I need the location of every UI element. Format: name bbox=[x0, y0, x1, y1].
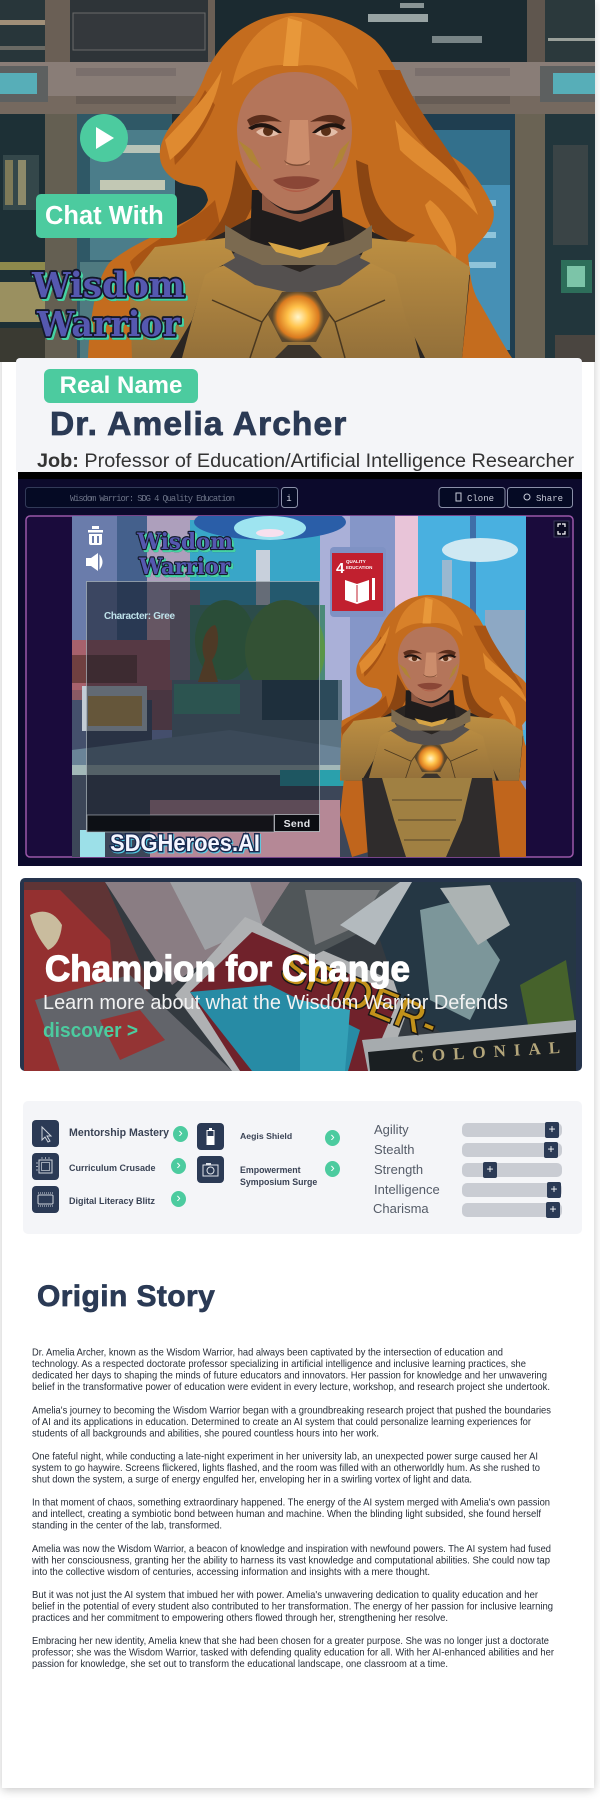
arrow: › bbox=[176, 1190, 181, 1205]
bar: intelligence bbox=[462, 1183, 562, 1197]
bar: charisma bbox=[462, 1203, 562, 1217]
scene logo: Warrior bbox=[138, 554, 230, 580]
job line: Job: Professor of Education/Artificial Intelligence Researcher bbox=[37, 450, 574, 472]
abilities and stats panel bbox=[23, 1101, 582, 1234]
paragraph 5 bbox=[31, 1544, 551, 1578]
paragraph 1: technology. As a respected doctorate professor specializing in artificial intelligence and inclusive learning practices, she bbox=[32, 1359, 526, 1370]
share button bbox=[508, 488, 572, 508]
play button bbox=[80, 114, 128, 162]
stat: agility: Agility bbox=[374, 1122, 409, 1137]
bar: intelligence: + bbox=[550, 1182, 558, 1196]
paragraph 2: students of all backgrounds and abilities, she poured countless hours into her work. bbox=[32, 1428, 379, 1439]
icon: chip bbox=[32, 1153, 59, 1180]
real name pill bbox=[44, 369, 198, 403]
info button bbox=[282, 488, 298, 508]
sound icon bbox=[86, 553, 102, 571]
paragraph 6: practices and her commitment to empowering others flowed through her, strengthening her resolve. bbox=[32, 1613, 448, 1624]
SDGHeroes.AI logo: SDGHeroes.AI bbox=[110, 830, 260, 857]
bar: stealth: + bbox=[547, 1142, 554, 1156]
comic collage bbox=[20, 878, 582, 1071]
wisdom warrior logo bbox=[31, 265, 185, 345]
arrow bbox=[173, 1126, 188, 1142]
paragraph 3 bbox=[32, 1452, 540, 1486]
chat overlay: Send bbox=[284, 818, 310, 830]
clone button bbox=[439, 488, 505, 508]
icon: cursor bbox=[32, 1120, 59, 1147]
paragraph 4: and intellect, creating a symbiotic bond between human and machine. When the blinding light subsided, she found herself bbox=[32, 1509, 541, 1520]
arrow: › bbox=[330, 1129, 335, 1144]
bar: charisma: + bbox=[549, 1202, 556, 1216]
paragraph 1 bbox=[32, 1348, 550, 1393]
chat with button bbox=[36, 194, 177, 238]
SDG 4 tile: EDUCATION bbox=[346, 565, 372, 570]
champion banner bbox=[20, 878, 582, 1071]
discover link: discover > bbox=[43, 1020, 138, 1042]
bar: agility bbox=[462, 1123, 562, 1137]
share button: Share bbox=[536, 494, 563, 504]
ability: digital literacy blitz: Digital Literacy Blitz bbox=[69, 1196, 155, 1206]
scene logo: Wisdom bbox=[136, 529, 233, 555]
paragraph 5: Amelia was now the Wisdom Warrior, a beacon of knowledge and inspiration with newfound powers. The AI system had fused bbox=[32, 1544, 551, 1555]
icon: camera bbox=[197, 1156, 224, 1183]
title field bbox=[26, 488, 278, 508]
arrow: › bbox=[176, 1157, 181, 1172]
bar: strength: + bbox=[486, 1162, 494, 1176]
arrow: › bbox=[330, 1160, 335, 1175]
scene logo bbox=[136, 529, 233, 580]
banner subtitle: Learn more about what the Wisdom Warrior Defends bbox=[43, 991, 508, 1014]
paragraph 1: belief in the transformative power of education were evident in every lecture, workshop, and research project she undertook. bbox=[32, 1382, 550, 1393]
hero banner bbox=[0, 0, 595, 362]
comic collage: SPIDER- bbox=[274, 942, 446, 1049]
paragraph 4 bbox=[32, 1498, 550, 1532]
paragraph 1: dedicated her days to shaping the minds of future educators and innovators. Her passion for knowledge and her unwavering bbox=[32, 1371, 547, 1382]
bar: strength bbox=[462, 1163, 562, 1177]
stat: charisma: Charisma bbox=[373, 1201, 429, 1216]
ability: mentorship mastery: Mentorship Mastery bbox=[69, 1127, 169, 1139]
paragraph 2: of AI and its applications in education. Determined to create an AI system that could personalize learning experiences for bbox=[32, 1417, 532, 1428]
icon: memory bbox=[32, 1186, 59, 1213]
SDG 4 tile: QUALITY bbox=[346, 559, 366, 564]
paragraph 6 bbox=[32, 1590, 553, 1624]
paragraph 2: Amelia's journey to becoming the Wisdom Warrior began with a groundbreaking research project that pushed the boundaries bbox=[32, 1405, 551, 1416]
trash icon bbox=[88, 526, 103, 545]
stat: intelligence: Intelligence bbox=[374, 1182, 440, 1197]
info button: i bbox=[286, 494, 292, 504]
ability: curriculum crusade: Curriculum Crusade bbox=[69, 1163, 156, 1173]
arrow bbox=[171, 1158, 186, 1174]
wisdom warrior logo: Warrior bbox=[36, 304, 181, 345]
origin story heading: Origin Story bbox=[37, 1280, 215, 1313]
title field: Wisdom Warrior: SDG 4 Quality Education bbox=[70, 494, 235, 504]
bar: stealth bbox=[462, 1143, 562, 1157]
SDG 4 tile bbox=[330, 547, 386, 617]
paragraph 6: But it was not just the AI system that imbued her with power. Amelia's unwavering dedication to quality education and her bbox=[32, 1590, 539, 1601]
arrow bbox=[325, 1161, 340, 1177]
stat: strength: Strength bbox=[374, 1162, 423, 1177]
background: control panels bbox=[0, 0, 595, 362]
icon: battery bbox=[197, 1123, 224, 1150]
paragraph 5: into the collective wisdom of centuries, accessing information and insights with a mere thought. bbox=[32, 1567, 430, 1578]
paragraph 3: system to go haywire. Screens flickered, lights flashed, and the room was filled with an otherworldly hum. As she rushed to bbox=[32, 1463, 540, 1474]
arrow: › bbox=[178, 1125, 183, 1140]
heroine in scene bbox=[340, 595, 526, 857]
arrow bbox=[325, 1130, 340, 1146]
paragraph 7: Embracing her new identity, Amelia knew that she had been chosen for a greater purpose. She was no longer just a doctorate bbox=[32, 1636, 549, 1647]
comic collage: COLONIAL bbox=[411, 1037, 569, 1066]
stage scene bbox=[72, 504, 546, 857]
bar: agility: + bbox=[548, 1122, 556, 1136]
chat overlay: Character: Gree bbox=[104, 611, 175, 622]
name panel bbox=[16, 358, 582, 472]
heroine illustration bbox=[88, 13, 512, 358]
stat: stealth: Stealth bbox=[374, 1142, 414, 1157]
paragraph 2 bbox=[32, 1405, 551, 1439]
ability: empowerment symposium surge: Symposium Surge bbox=[240, 1177, 317, 1187]
ability: empowerment symposium surge: Empowerment bbox=[240, 1165, 301, 1175]
arrow bbox=[171, 1191, 186, 1207]
chat with button: Chat With bbox=[45, 202, 164, 230]
origin story text bbox=[31, 1348, 555, 1670]
paragraph 4: In that moment of chaos, something extraordinary happened. The energy of the AI system merged with Amelia's own passion bbox=[32, 1498, 550, 1509]
paragraph 3: shut down the system, a surge of energy engulfed her, enveloping her in a swirling vortex of light and data. bbox=[32, 1474, 472, 1486]
paragraph 7 bbox=[32, 1636, 555, 1670]
banner title: Champion for Change bbox=[45, 948, 410, 989]
paragraph 4: standing in the center of the lab, transformed. bbox=[32, 1521, 222, 1532]
video chat panel bbox=[18, 472, 582, 866]
chat overlay bbox=[86, 582, 320, 832]
ability: aegis shield: Aegis Shield bbox=[240, 1131, 292, 1141]
SDG 4 tile: 4 bbox=[336, 560, 345, 577]
real name pill: Real Name bbox=[60, 372, 182, 399]
clone button: Clone bbox=[467, 494, 494, 504]
fullscreen icon bbox=[554, 521, 569, 537]
paragraph 6: belief in the potential of every student also contributed to her transformation. The energy of her passion for inclusive learning bbox=[32, 1602, 553, 1612]
paragraph 3: One fateful night, while conducting a late-night experiment in her university lab, an unexpected power surge caused her AI bbox=[32, 1452, 538, 1462]
ability: empowerment symposium surge bbox=[240, 1165, 317, 1187]
paragraph 5: with her consciousness, granting her the ability to harness its vast knowledge and computational abilities. She could now tap bbox=[31, 1555, 550, 1566]
wisdom warrior logo: Wisdom bbox=[31, 265, 185, 306]
paragraph 1: Dr. Amelia Archer, known as the Wisdom Warrior, had always been captivated by the intersection of education and bbox=[32, 1348, 503, 1359]
paragraph 7: passion for knowledge, she set out to transform the educational landscape, one classroom at a time. bbox=[32, 1659, 448, 1670]
paragraph 7: professor; she was the Wisdom Warrior, tasked with defending quality education for all. With her AI-enhanced abilities and her bbox=[32, 1648, 555, 1659]
stage frame bbox=[26, 516, 573, 857]
character name: Dr. Amelia Archer bbox=[50, 406, 347, 443]
